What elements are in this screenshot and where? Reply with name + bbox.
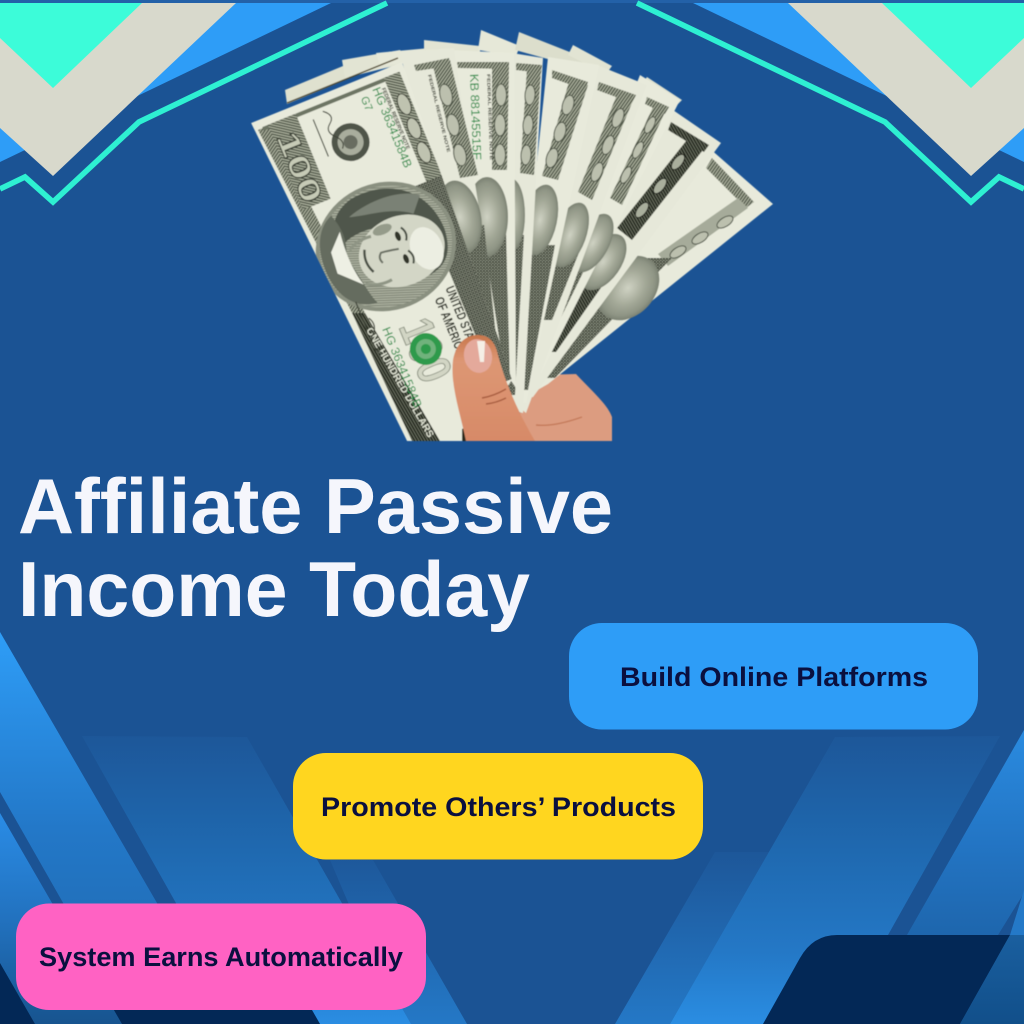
treasury heading text: UNITED STATES [442,284,485,358]
front bill [251,62,524,441]
bottom left angled bands [0,632,467,1024]
federal reserve note caption: FEDERAL RESERVE NOTE [380,87,410,151]
bill 2 [400,48,501,350]
thumb [452,335,535,441]
top right chevron decoration [637,3,1024,202]
top edge strip [0,0,1024,3]
top left chevron decoration [0,3,387,202]
bottom right angled bands [615,730,1024,1024]
bill 9 [520,140,773,400]
treasury seal [331,122,370,162]
title [18,462,613,633]
title: Affiliate Passive [18,462,613,550]
bill 3: FEDERAL RESERVE NOTE [486,74,494,160]
step pill: promote others' products [293,753,703,860]
treasury heading text [435,285,474,351]
bill 6 [510,65,647,413]
serial number bottom: HG 36341584B [379,325,425,410]
gap shadow under thumb [462,422,490,441]
step pill: promote others' products: Promote Others’ Products [321,792,676,822]
bill 4 [495,53,543,413]
large grey 100 with green seal [398,318,452,382]
bill 3: KB 88145515F [467,74,484,160]
corner 100 numeral: 100 [269,127,328,208]
step pill: system earns automatically [16,904,426,1010]
hand palm [505,374,612,441]
lower signature [355,302,384,354]
lower left engraved band [258,125,440,441]
bill 8 [515,108,721,400]
bill 5 [510,57,599,403]
palm crease [536,417,582,425]
step pill: system earns automatically: System Earns Automatically [39,942,403,972]
series code: G7 [358,95,375,113]
back bills edges [285,30,682,106]
bill 7 [515,75,680,395]
step pill: build online platforms [569,623,978,730]
bill 2: FEDERAL RESERVE NOTE [427,74,451,153]
title: Income Today [18,545,530,633]
one hundred dollars strip text: ONE HUNDRED DOLLARS [363,326,436,440]
step pill: build online platforms: Build Online Platforms [620,662,928,692]
treasury heading text: OF AMERICA [432,295,469,358]
top ovals [396,92,432,164]
portrait of Franklin [315,181,456,312]
serial number top: HG 36341584B [369,85,415,170]
large grey 100 with green seal: 100 [388,311,462,390]
bill 3 [450,50,516,388]
hand holding fan of hundred dollar bills [251,30,773,441]
engraved frame [262,71,512,382]
signature [312,109,346,156]
